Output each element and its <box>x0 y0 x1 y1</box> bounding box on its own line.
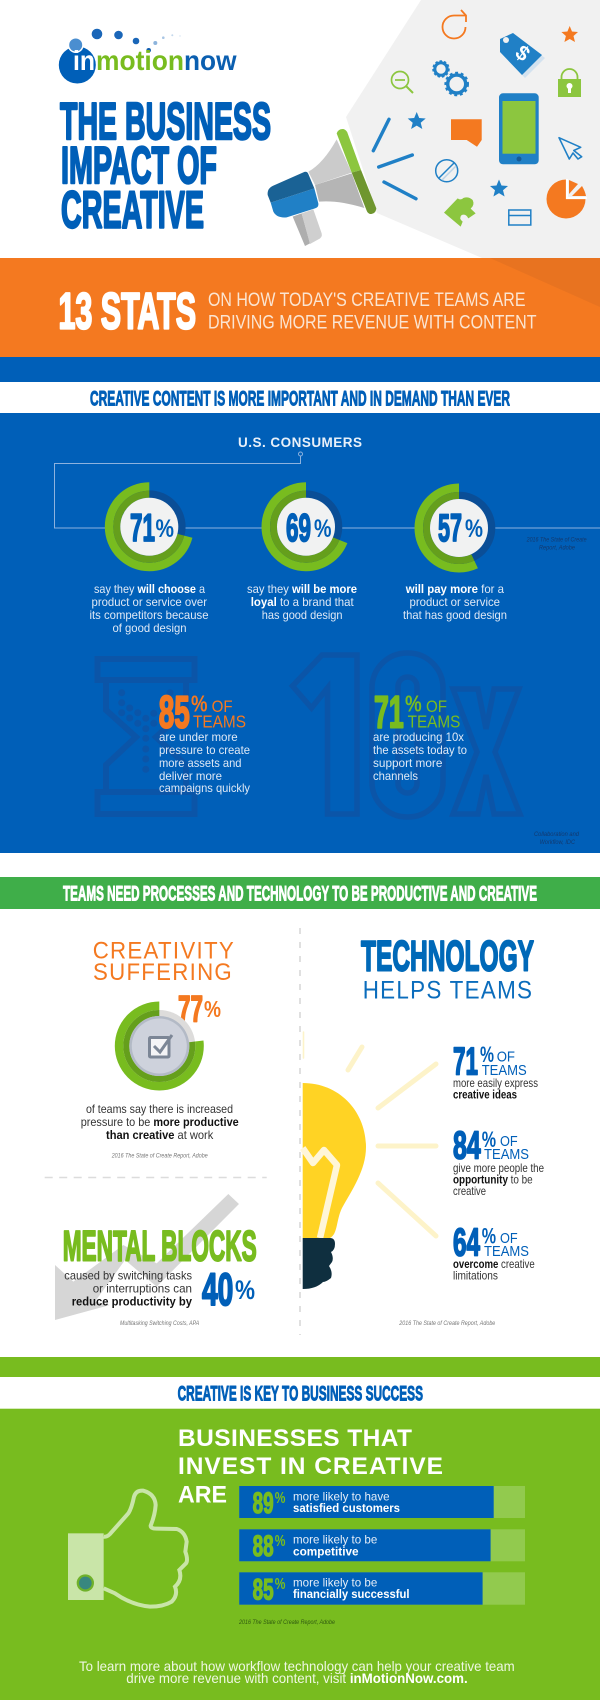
text: choose: product or service over <box>92 595 207 609</box>
donut: 69% <box>266 486 346 567</box>
text: pressure <box>81 1102 239 1142</box>
stat: 64%: overcome creative <box>453 1257 535 1271</box>
logo: inMotionNow: now <box>184 45 237 76</box>
panel: creative content section <box>0 357 600 853</box>
panel: technology helps teams <box>303 933 544 1327</box>
bar: 88%: 88 <box>253 1530 274 1563</box>
stat: 84%: 84 <box>453 1124 481 1167</box>
donut: 57%: 57 <box>438 507 462 550</box>
text: pay more: that has good design <box>403 608 507 622</box>
title: THE BUSINESS <box>60 93 271 151</box>
donut: 57%: % <box>465 515 483 543</box>
logo: inMotionNow <box>59 29 237 84</box>
stat: 77%: % <box>204 996 221 1022</box>
source: adobe: Report, Adobe <box>539 544 575 552</box>
title: CREATIVE <box>61 182 204 240</box>
heading: businesses that invest <box>178 1425 443 1509</box>
heading: SUFFERING <box>93 959 233 986</box>
stat: 71% of teams: 71 <box>374 686 404 737</box>
source: 2016 The State of Create Report, Adobe <box>111 1152 208 1159</box>
stat: 71% of teams: the assets today to <box>373 743 467 757</box>
stat: 71% <box>453 1040 538 1102</box>
icon: price tag: $ <box>511 41 534 66</box>
icon: cursor <box>559 138 582 159</box>
text: loyal <box>247 582 357 622</box>
stat: 71% of teams: are producing 10x <box>373 730 464 744</box>
stat: 71% of teams: channels <box>373 769 418 783</box>
source: 2016 The State of Create Report, Adobe <box>398 1320 496 1327</box>
stat: 85% of teams: pressure to create <box>159 743 250 757</box>
stat: 64%: TEAMS <box>484 1244 529 1260</box>
icon: light bulb <box>303 1032 436 1289</box>
bar: 85%: more likely to be <box>293 1576 378 1590</box>
stat: 84%: % <box>482 1127 496 1152</box>
heading: HELPS TEAMS <box>363 978 533 1005</box>
source: adobe: 2016 The State of Create <box>526 536 587 544</box>
stat: 84%: opportunity to be <box>453 1172 533 1186</box>
icon: magnifier <box>392 72 413 93</box>
source: idc: Collaboration and <box>534 831 579 838</box>
stat: 71%: % <box>480 1042 494 1067</box>
icon: hourglass <box>98 659 194 814</box>
stat: 71% of teams: support more <box>373 756 443 770</box>
panel: mental blocks <box>55 1194 257 1327</box>
bar: 88% <box>239 1529 525 1563</box>
stat: 85% of teams: % <box>191 690 208 716</box>
icon: puzzle piece <box>444 197 476 227</box>
stat: 85% of teams: OF <box>212 697 233 716</box>
bar: 89%: 89 <box>253 1487 274 1520</box>
source: 2016 The State of Create Report, Adobe <box>238 1619 335 1626</box>
banner subtitle <box>208 289 537 334</box>
bar: 89%: more likely to have <box>293 1490 390 1504</box>
call to action: drive more revenue with content, visit inMotionNow.com. <box>126 1670 468 1686</box>
banner subtitle: ON HOW TODAY'S CREATIVE TEAMS ARE <box>208 289 526 311</box>
text: pressure: pressure to be more productive <box>81 1115 239 1129</box>
text: choose: of good design <box>112 621 186 635</box>
text: loyal: say they will be more <box>247 582 357 596</box>
connector line <box>54 452 600 528</box>
bar: 88%: competitive <box>293 1544 359 1558</box>
text: loyal: has good design <box>262 608 342 622</box>
icon: orange star <box>561 26 578 42</box>
heading: MENTAL BLOCKS <box>63 1223 257 1271</box>
icon: checkbox <box>150 1035 172 1057</box>
heading: businesses that invest: BUSINESSES THAT <box>178 1425 412 1452</box>
text: pressure: than creative at work <box>106 1128 214 1142</box>
text: pay more <box>403 582 507 622</box>
donut: 71% <box>109 486 190 567</box>
icon: blue star 2 <box>490 180 508 196</box>
stat: 85% of teams: are under more <box>159 730 238 744</box>
bar: 89% <box>239 1486 525 1520</box>
title: IMPACT OF <box>61 137 217 195</box>
donut: 71%: 71 <box>130 507 155 550</box>
stat: 64% <box>453 1221 535 1282</box>
stat: 85% of teams: deliver more <box>159 769 222 783</box>
section bar: teams need processes <box>0 877 600 909</box>
donut: 77% <box>119 1006 200 1086</box>
text: switching: reduce productivity by <box>72 1294 192 1308</box>
donut: 69%: % <box>314 515 332 543</box>
icon: thumbs up <box>68 1491 187 1607</box>
section heading: CREATIVE IS KEY TO BUSINESS SUCCESS <box>178 1383 423 1406</box>
source: idc: Workflow, IDC <box>540 839 575 846</box>
donut: 71%: % <box>156 515 174 543</box>
icon: sound lines <box>373 119 416 199</box>
stat: 64%: 64 <box>453 1221 480 1264</box>
text: choose <box>90 582 209 635</box>
bar: 85%: 85 <box>253 1574 274 1606</box>
banner subtitle: DRIVING MORE REVENUE WITH CONTENT <box>208 312 537 334</box>
text: switching: caused by switching tasks <box>64 1269 192 1283</box>
bar: 85%: financially successful <box>293 1587 410 1601</box>
text: pressure: of teams say there is increased <box>86 1102 233 1116</box>
stat: 85% of teams: TEAMS <box>193 711 246 731</box>
heading: businesses that invest: INVEST IN CREATIVE <box>178 1453 443 1480</box>
text: switching <box>64 1269 192 1308</box>
call to action <box>79 1658 515 1686</box>
stat: 71% of teams: OF <box>426 697 447 716</box>
stat: 84%: TEAMS <box>484 1147 529 1163</box>
icon: blue star <box>408 112 426 129</box>
text: choose: its competitors because <box>90 608 209 622</box>
stat: 71% of teams <box>373 686 467 783</box>
bar: 89%: % <box>275 1490 286 1507</box>
source: adobe <box>526 536 587 552</box>
text: switching: or interruptions can <box>93 1282 192 1296</box>
donut: 57% <box>419 488 499 568</box>
source: idc <box>534 831 579 846</box>
stat: 71% of teams: % <box>405 690 422 716</box>
icon: no sign <box>436 160 458 182</box>
stat: 40%: % <box>235 1275 255 1305</box>
bar: 88%: more likely to be <box>293 1533 378 1547</box>
call to action: To learn more about how workflow technology can help your creative team <box>79 1658 515 1674</box>
icon: padlock <box>558 69 581 97</box>
bar: 85%: % <box>275 1576 286 1593</box>
stat: 71%: TEAMS <box>482 1063 527 1079</box>
logo: inMotionNow: in <box>73 45 95 76</box>
banner headline: 13 STATS <box>58 282 196 339</box>
donut: 69%: 69 <box>286 507 311 550</box>
stat: 85% of teams: more assets and <box>159 756 242 770</box>
panel: creativity suffering <box>81 937 239 1159</box>
heading <box>93 937 235 986</box>
consumers label: U.S. CONSUMERS <box>238 435 362 450</box>
bar: 85% <box>239 1572 525 1606</box>
icon: price tag <box>500 33 545 78</box>
panel: business success <box>0 1357 600 1700</box>
graphic: 10x outline <box>292 653 520 817</box>
icon: gears <box>433 61 468 95</box>
stat: 71%: OF <box>497 1050 515 1066</box>
source: Multitasking Switching Costs, APA <box>120 1320 199 1327</box>
title <box>60 93 271 240</box>
icon: speech bubble <box>451 119 482 147</box>
icon: refresh <box>442 10 466 38</box>
bar: 88%: % <box>275 1533 286 1550</box>
heading: CREATIVITY <box>93 937 235 964</box>
panel: orange banner <box>0 258 600 357</box>
logo: inMotionNow: motion <box>96 45 184 76</box>
stat: 40%: 40 <box>202 1264 233 1315</box>
graphic: grey arrow <box>55 1194 239 1320</box>
stat: 84% <box>453 1124 544 1198</box>
heading <box>361 933 534 1005</box>
icon: card <box>509 210 531 225</box>
stat: 71%: more easily express <box>453 1076 538 1090</box>
icon: megaphone <box>268 129 376 246</box>
stat: 64%: OF <box>500 1231 518 1247</box>
icon: pie chart <box>546 175 592 218</box>
stat: 84%: give more people the <box>453 1161 544 1175</box>
stat: 85% of teams: 85 <box>159 686 190 737</box>
text: loyal: loyal to a brand that <box>251 595 354 609</box>
text: pay more: product or service <box>410 595 500 609</box>
text: choose: say they will choose a <box>94 582 205 596</box>
stat: 64%: limitations <box>453 1268 498 1282</box>
stat: 85% of teams: campaigns quickly <box>159 781 250 795</box>
text: pay more: will pay more for a <box>405 582 504 596</box>
bar: 89%: satisfied customers <box>293 1501 400 1515</box>
stat: 71%: 71 <box>453 1040 478 1083</box>
heading: businesses that invest: ARE <box>178 1482 227 1509</box>
stat: 84%: OF <box>500 1134 518 1150</box>
stat: 77%: 77 <box>178 988 203 1029</box>
stat: 64%: % <box>482 1224 496 1248</box>
stat: 85% of teams <box>159 686 250 795</box>
stat: 71%: creative ideas <box>453 1088 517 1102</box>
stat: 71% of teams: TEAMS <box>408 711 460 731</box>
stat: 84%: creative <box>453 1184 486 1198</box>
icon: smartphone <box>499 93 539 164</box>
panel: header <box>59 0 600 258</box>
